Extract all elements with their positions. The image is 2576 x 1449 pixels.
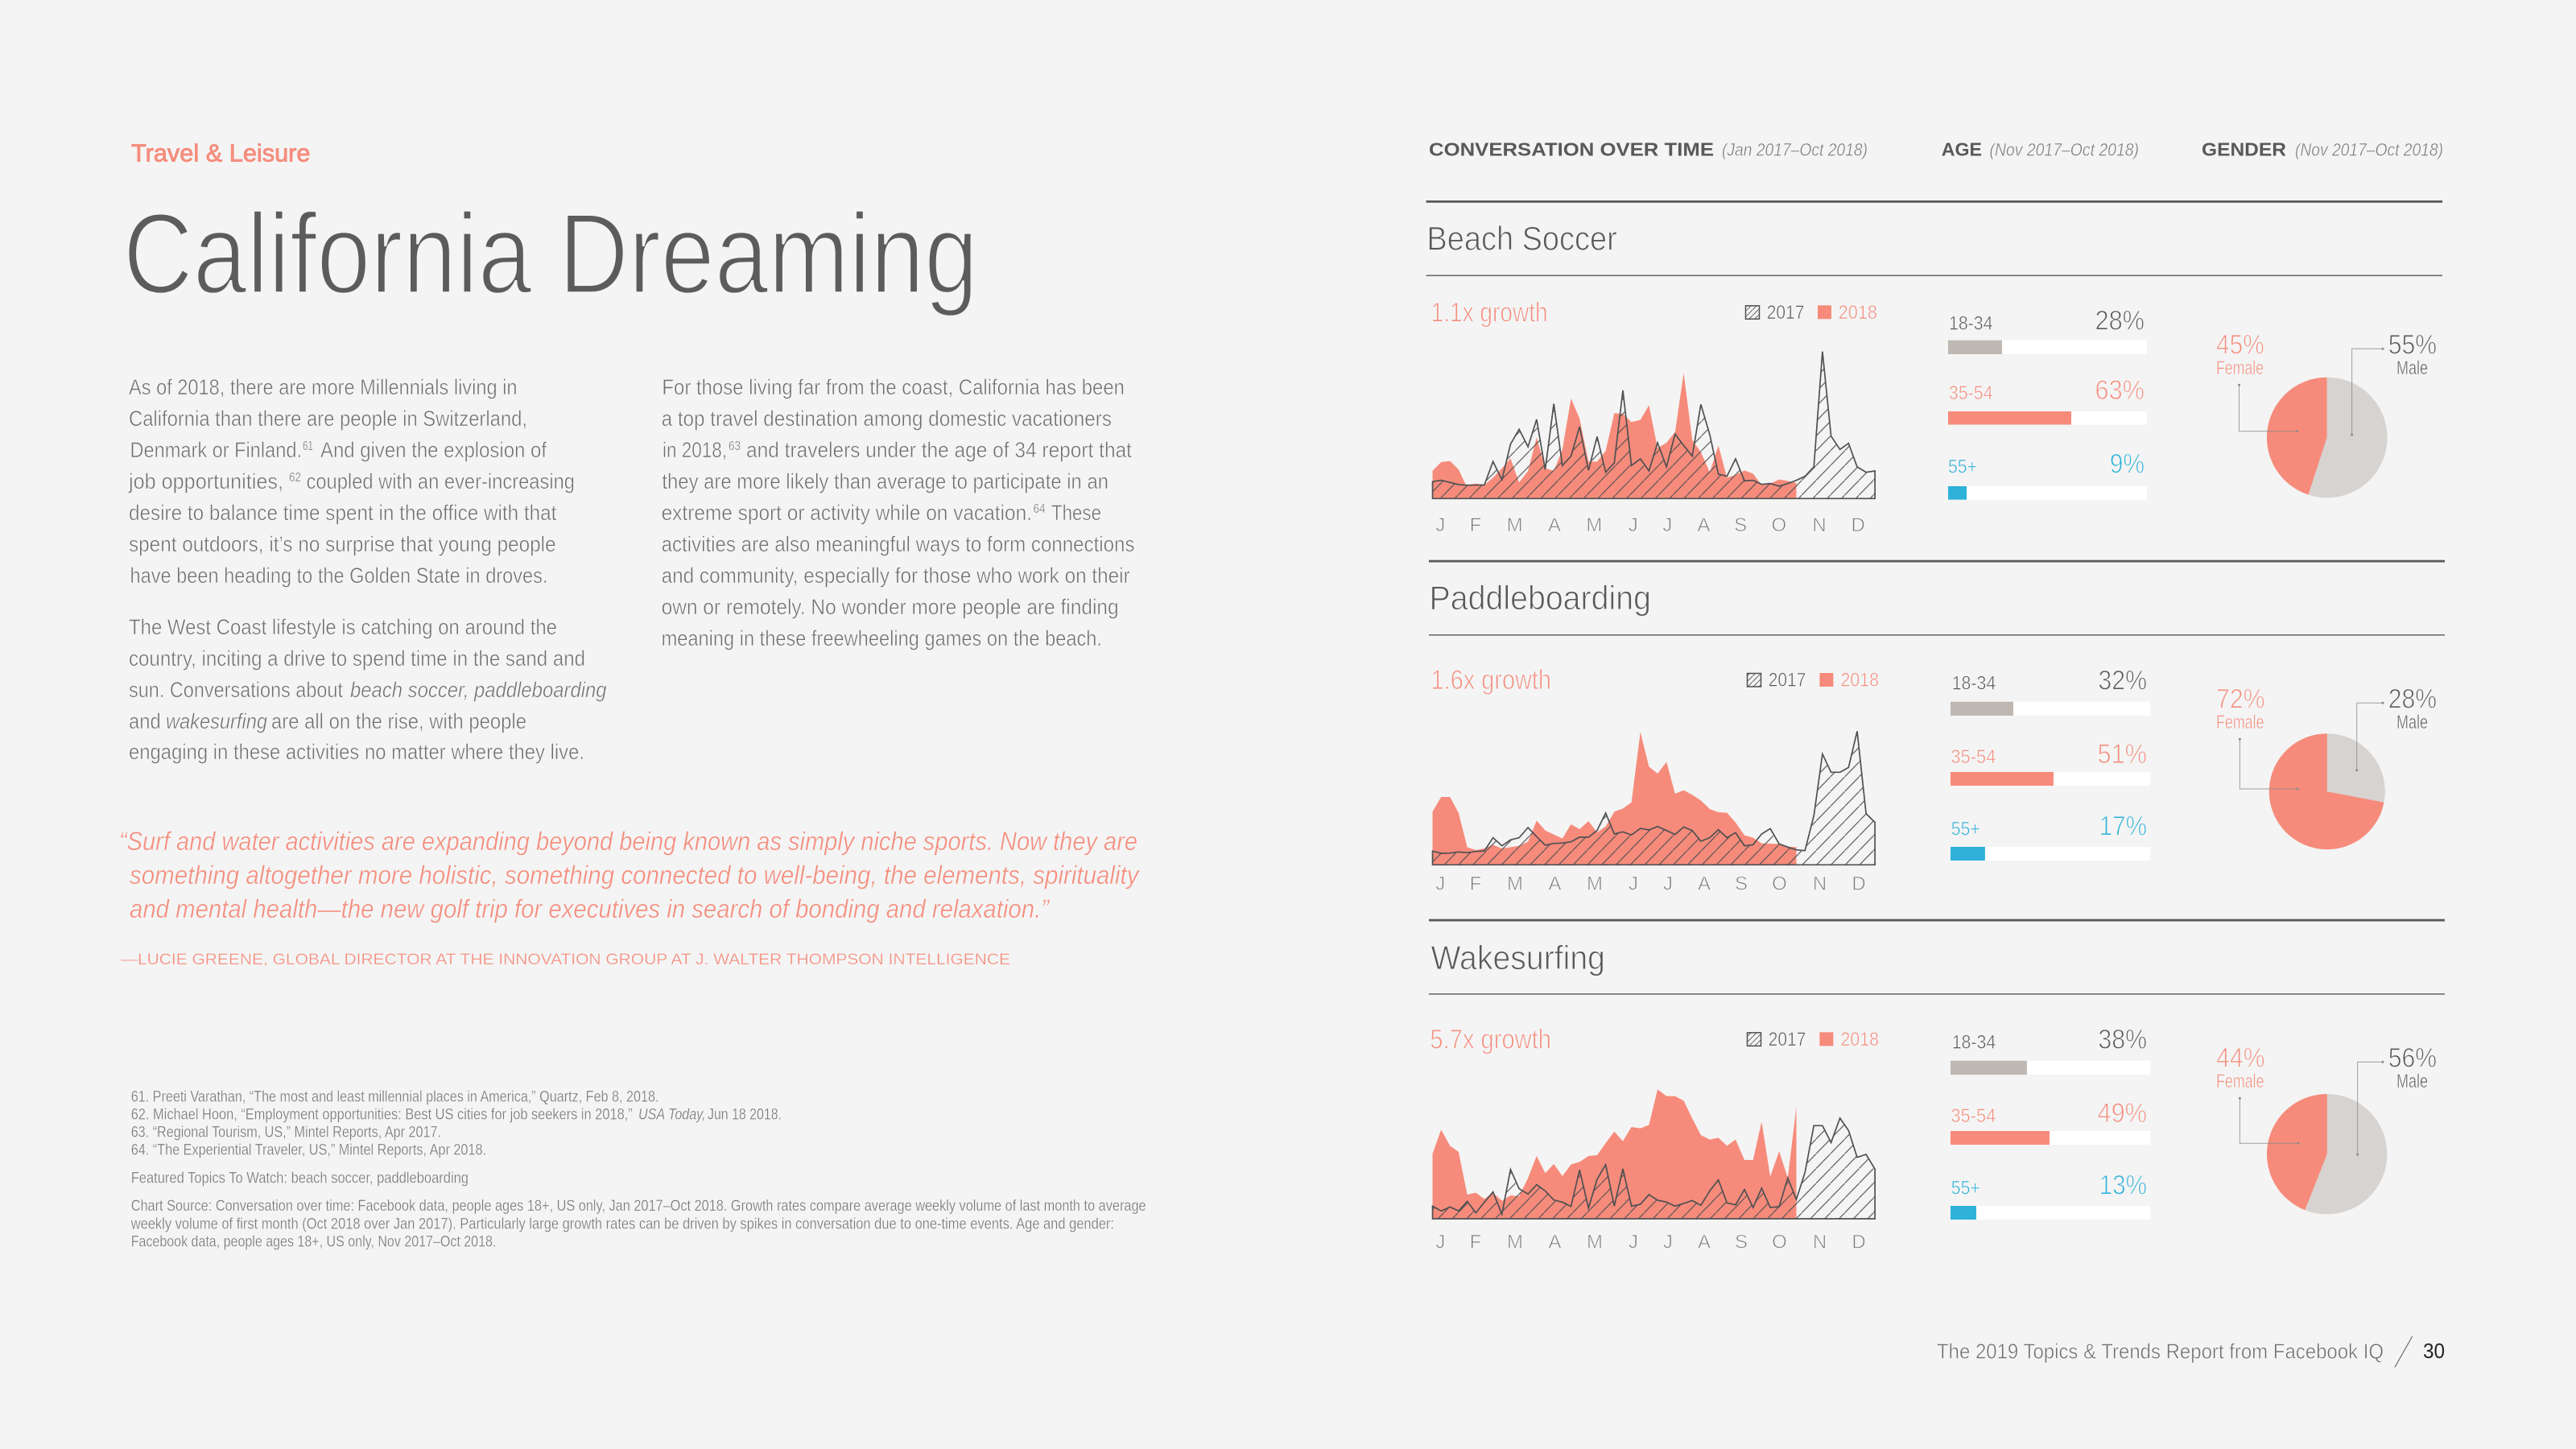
age bars: 28% xyxy=(2095,305,2145,336)
month axis labels: S xyxy=(1735,1232,1748,1253)
footnotes xyxy=(131,1088,782,1158)
month axis labels: A xyxy=(1698,873,1711,895)
age bars: 18-34 xyxy=(1952,673,1996,695)
gender pie chart: 56% xyxy=(2388,1043,2437,1074)
month axis labels xyxy=(1435,1232,1866,1253)
body text: right column: they are more likely than average to participate in an xyxy=(662,469,1108,493)
month axis labels: J xyxy=(1435,514,1445,536)
footnotes: 61. Preeti Varathan, “The most and least millennial places in America,” Quartz, Feb 8, 2018. xyxy=(131,1088,658,1105)
gender pie chart: 44% xyxy=(2216,1043,2265,1074)
area chart: paddleboarding conversation over time xyxy=(1433,731,1875,865)
body text: left column: coupled with an ever-increasing xyxy=(306,469,575,493)
gender pie chart: Female xyxy=(2216,712,2264,733)
month axis labels: A xyxy=(1548,1232,1562,1253)
month axis labels: S xyxy=(1734,514,1747,536)
body text: right column: meaning in these freewheeling games on the beach. xyxy=(662,626,1102,650)
featured topics note: Featured Topics To Watch: beach soccer, paddleboarding xyxy=(131,1170,469,1187)
body text: right column: in 2018, xyxy=(663,438,727,462)
pull quote xyxy=(119,827,1140,923)
body text: left column: and xyxy=(129,709,161,733)
section heading: Paddleboarding: Paddleboarding xyxy=(1430,579,1651,617)
month axis labels: N xyxy=(1813,1232,1827,1253)
body text: left column: And given the explosion of xyxy=(320,438,547,462)
gender pie chart: 45% xyxy=(2216,329,2264,360)
month axis labels: O xyxy=(1771,514,1786,536)
month axis labels: J xyxy=(1663,873,1673,895)
month axis labels: F xyxy=(1470,1232,1481,1253)
body text: right column: extreme sport or activity while on vacation. xyxy=(662,501,1032,525)
column headers: (Nov 2017–Oct 2018) xyxy=(1990,139,2139,159)
month axis labels: O xyxy=(1772,873,1787,895)
month axis labels: J xyxy=(1629,514,1638,536)
month axis labels: A xyxy=(1548,514,1561,536)
column headers: CONVERSATION OVER TIME xyxy=(1429,138,1714,159)
chart legend: 2017 xyxy=(1767,302,1804,324)
month axis labels: F xyxy=(1470,873,1481,895)
section heading: Beach Soccer: Beach Soccer xyxy=(1426,220,1617,258)
body text: right column: and travelers under the age of 34 report that xyxy=(746,438,1132,462)
footer: The 2019 Topics & Trends Report from Facebook IQ xyxy=(1937,1340,2384,1364)
chart source note: Facebook data, people ages 18+, US only, Nov 2017–Oct 2018. xyxy=(131,1234,496,1251)
month axis labels: A xyxy=(1697,514,1710,536)
month axis labels: D xyxy=(1852,1232,1866,1253)
month axis labels: N xyxy=(1813,873,1827,895)
chart source note: Chart Source: Conversation over time: Facebook data, people ages 18+, US only, Jan 2017–Oct 2018. Growth rates compare average weekly volume of last month to average xyxy=(131,1198,1146,1215)
column headers: (Jan 2017–Oct 2018) xyxy=(1722,139,1868,159)
body text: left column: The West Coast lifestyle is catching on around the xyxy=(129,615,557,639)
month axis labels: D xyxy=(1852,514,1865,536)
month axis labels xyxy=(1435,514,1865,536)
month axis labels: O xyxy=(1772,1232,1787,1253)
body text: left column: have been heading to the Golden State in droves. xyxy=(130,564,547,588)
body text: right column xyxy=(662,375,1135,650)
age bars: 63% xyxy=(2095,375,2145,406)
month axis labels: M xyxy=(1586,514,1602,536)
body text: left column: sun. Conversations about xyxy=(129,678,343,702)
age bars: 18-34 xyxy=(1949,312,1992,334)
gender pie chart: 28% xyxy=(2388,683,2437,714)
chart legend: 2017 xyxy=(1769,1029,1806,1051)
age bars: 55+ xyxy=(1948,456,1977,477)
area chart: wakesurfing conversation over time xyxy=(1433,1089,1875,1219)
gender pie chart xyxy=(2216,683,2437,849)
month axis labels: M xyxy=(1507,514,1523,536)
month axis labels: N xyxy=(1812,514,1827,536)
gender pie chart: 72% xyxy=(2216,683,2265,714)
month axis labels: A xyxy=(1698,1232,1711,1253)
gender pie chart: Female xyxy=(2216,357,2264,379)
age bars xyxy=(1951,1025,2150,1220)
chart legend: 2018 xyxy=(1840,1029,1879,1051)
column headers xyxy=(1429,138,2443,159)
gender pie chart: Male xyxy=(2396,1071,2428,1092)
month axis labels: J xyxy=(1663,1232,1673,1253)
gender pie chart: Male xyxy=(2396,712,2428,733)
growth label: 5.7x: 5.7x growth xyxy=(1430,1024,1551,1055)
body text: left column: As of 2018, there are more Millennials living in xyxy=(129,375,517,399)
month axis labels: M xyxy=(1587,873,1603,895)
footnotes: 62. Michael Hoon, “Employment opportunities: Best US cities for job seekers in 2018,” xyxy=(131,1106,633,1123)
month axis labels: J xyxy=(1629,873,1638,895)
chart legend xyxy=(1745,302,1877,324)
body text: left column: California than there are people in Switzerland, xyxy=(129,407,527,431)
age bars xyxy=(1948,305,2147,500)
body text: right column: own or remotely. No wonder more people are finding xyxy=(662,595,1119,619)
age bars: 51% xyxy=(2098,739,2147,770)
footnotes: 64. “The Experiential Traveler, US,” Mintel Reports, Apr 2018. xyxy=(131,1141,486,1158)
chart legend xyxy=(1747,670,1879,691)
footer: 30 xyxy=(2423,1339,2445,1363)
body text: right column: and community, especially for those who work on their xyxy=(662,564,1130,588)
chart legend: 2018 xyxy=(1840,670,1879,691)
age bars: 55+ xyxy=(1951,1177,1980,1199)
chart legend: 2018 xyxy=(1839,302,1877,324)
body text: left column: 61 xyxy=(303,440,313,453)
age bars: 18-34 xyxy=(1952,1032,1996,1054)
body text: left column: 62 xyxy=(289,471,301,485)
pull quote: something altogether more holistic, something connected to well-being, the elements, spirituality xyxy=(130,861,1140,890)
body text: left column: beach soccer, paddleboarding xyxy=(350,678,607,702)
month axis labels: M xyxy=(1587,1232,1603,1253)
pull quote: “Surf and water activities are expanding beyond being known as simply niche sports. Now they are xyxy=(119,827,1137,856)
body text: left column: Denmark or Finland. xyxy=(130,438,302,462)
footnotes: Jun 18 2018. xyxy=(708,1106,782,1123)
month axis labels: D xyxy=(1852,873,1866,895)
panel: Wakesurfing xyxy=(1430,939,2437,1253)
age bars: 32% xyxy=(2098,666,2147,696)
month axis labels: F xyxy=(1470,514,1481,536)
age bars: 55+ xyxy=(1951,818,1980,840)
panel: Paddleboarding xyxy=(1430,579,2437,895)
gender pie chart: 55% xyxy=(2388,329,2437,360)
column headers: AGE xyxy=(1942,138,1982,159)
body text: left column: spent outdoors, it’s no surprise that young people xyxy=(129,532,556,556)
month axis labels: A xyxy=(1548,873,1562,895)
month axis labels: J xyxy=(1435,873,1445,895)
title: California Dreaming xyxy=(123,190,978,318)
body text: left column: desire to balance time spent in the office with that xyxy=(129,501,557,525)
pull quote: and mental health—the new golf trip for executives in search of bonding and relaxation.” xyxy=(130,894,1050,923)
footnotes: 63. “Regional Tourism, US,” Mintel Reports, Apr 2017. xyxy=(131,1124,441,1141)
age bars xyxy=(1951,666,2150,861)
age bars: 35-54 xyxy=(1951,1105,1996,1127)
age bars: 13% xyxy=(2099,1170,2147,1200)
body text: left column: engaging in these activities no matter where they live. xyxy=(129,740,584,764)
growth label: 1.6x: 1.6x growth xyxy=(1431,665,1551,696)
month axis labels: M xyxy=(1507,1232,1523,1253)
body text: left column: are all on the rise, with people xyxy=(271,709,526,733)
chart legend xyxy=(1747,1029,1879,1051)
gender pie chart xyxy=(2216,1043,2437,1214)
age bars: 35-54 xyxy=(1951,746,1996,768)
body text: right column: 64 xyxy=(1034,502,1046,516)
section heading: Wakesurfing: Wakesurfing xyxy=(1431,939,1605,976)
age bars: 49% xyxy=(2098,1098,2147,1129)
panel: Beach Soccer xyxy=(1426,220,2437,536)
chart source note: weekly volume of first month (Oct 2018 over Jan 2017). Particularly large growth rates can be driven by spikes in conversation due to one-time events. Age and gender: xyxy=(130,1216,1114,1233)
quote attribution: —LUCIE GREENE, GLOBAL DIRECTOR AT THE INNOVATION GROUP AT J. WALTER THOMPSON INTELLIGENCE xyxy=(121,952,1010,968)
gender pie chart: Male xyxy=(2396,357,2428,379)
month axis labels: J xyxy=(1435,1232,1445,1253)
age bars: 9% xyxy=(2110,448,2145,479)
body text: right column: 63 xyxy=(729,440,741,453)
gender pie chart: Female xyxy=(2216,1071,2264,1092)
column headers: (Nov 2017–Oct 2018) xyxy=(2295,139,2443,159)
body text: left column xyxy=(128,375,607,764)
body text: right column: These xyxy=(1051,501,1101,525)
area chart: beach soccer conversation over time xyxy=(1433,352,1875,498)
age bars: 38% xyxy=(2098,1025,2147,1055)
body text: left column: country, inciting a drive to spend time in the sand and xyxy=(129,646,585,671)
body text: left column: wakesurfing xyxy=(166,709,267,733)
growth label: 1.1x: 1.1x growth xyxy=(1431,297,1548,328)
age bars: 35-54 xyxy=(1949,382,1992,404)
month axis labels: M xyxy=(1507,873,1523,895)
month axis labels: S xyxy=(1735,873,1748,895)
body text: right column: a top travel destination among domestic vacationers xyxy=(662,407,1112,431)
body text: left column: job opportunities, xyxy=(128,469,283,493)
category label: Travel & Leisure: Travel & Leisure xyxy=(131,139,311,167)
body text: right column: For those living far from the coast, California has been xyxy=(662,375,1125,399)
column headers: GENDER xyxy=(2202,138,2286,159)
month axis labels xyxy=(1435,873,1866,895)
footnotes: USA Today, xyxy=(638,1106,705,1123)
age bars: 17% xyxy=(2099,811,2147,841)
month axis labels: J xyxy=(1662,514,1672,536)
chart source note xyxy=(130,1198,1146,1251)
gender pie chart xyxy=(2216,329,2437,497)
month axis labels: J xyxy=(1629,1232,1638,1253)
body text: right column: activities are also meaningful ways to form connections xyxy=(662,532,1135,556)
chart legend: 2017 xyxy=(1769,670,1806,691)
